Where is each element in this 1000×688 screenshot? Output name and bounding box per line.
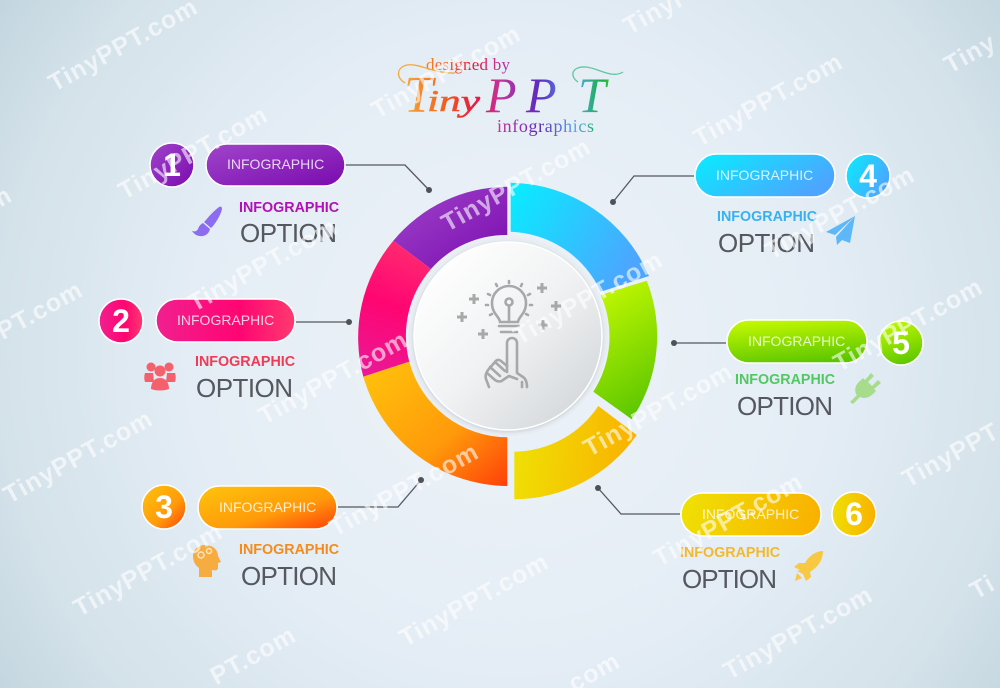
icon: electric plug bbox=[850, 373, 881, 404]
watermark: repeated TinyPPT.com: TinyPPT.com bbox=[367, 19, 526, 125]
label 1: INFOGRAPHIC bbox=[239, 200, 339, 216]
watermark: repeated TinyPPT.com: TinyPPT.com bbox=[254, 325, 413, 431]
icon: paper plane bbox=[826, 216, 855, 245]
label 2 bbox=[195, 354, 295, 403]
label 6: OPTION bbox=[682, 564, 777, 594]
segment 1: purple bbox=[393, 187, 507, 269]
watermark: repeated TinyPPT.com: TinyPPT.com bbox=[761, 160, 920, 266]
icon: rocket bbox=[794, 551, 823, 581]
number badge 1 bbox=[150, 143, 194, 187]
segment 3: orange bbox=[363, 362, 507, 486]
leader line 4 bbox=[610, 176, 694, 205]
leader line 5 bbox=[671, 340, 726, 346]
label 5 bbox=[735, 372, 835, 421]
icon: group of people bbox=[144, 362, 176, 390]
label 4: OPTION bbox=[718, 228, 815, 258]
pill 4: INFOGRAPHIC bbox=[716, 167, 813, 183]
number badge 6: 6 bbox=[845, 496, 863, 532]
pill 6: INFOGRAPHIC bbox=[702, 506, 799, 522]
label 2: OPTION bbox=[196, 373, 293, 403]
leader line 3 bbox=[338, 477, 424, 507]
label 3: INFOGRAPHIC bbox=[239, 542, 339, 558]
watermark: repeated TinyPPT.com: TinyPPT.com bbox=[437, 132, 596, 238]
label 6: INFOGRAPHIC bbox=[680, 545, 780, 561]
label 6 bbox=[680, 545, 780, 594]
number badge 2 bbox=[99, 299, 143, 343]
label 5: OPTION bbox=[737, 391, 833, 421]
number badge 2: 2 bbox=[112, 303, 130, 339]
icon: light bulb with pointing hand bbox=[457, 281, 561, 387]
segment 6: yellow bbox=[514, 406, 637, 499]
leader line 2 bbox=[296, 319, 352, 325]
watermark: repeated TinyPPT.com: TinyPPT.com bbox=[509, 245, 668, 351]
logo: designed by TinyPPT infographics: T bbox=[404, 67, 436, 124]
watermark: repeated TinyPPT.com: TinyPPT.com bbox=[69, 517, 228, 623]
watermark: repeated TinyPPT.com: TinyPPT.com bbox=[649, 467, 808, 573]
label 3 bbox=[239, 542, 339, 591]
segment 4: blue bbox=[511, 183, 649, 292]
pill 4 bbox=[695, 154, 835, 197]
icon: paint brush bbox=[192, 207, 222, 236]
pill 2: INFOGRAPHIC bbox=[177, 312, 274, 328]
logo: designed by TinyPPT infographics: iny bbox=[427, 83, 480, 118]
watermark: repeated TinyPPT.com: TinyPPT.com bbox=[719, 580, 878, 686]
watermark: repeated TinyPPT.com: TinyPPT.com bbox=[184, 212, 343, 318]
label 5: INFOGRAPHIC bbox=[735, 372, 835, 388]
pill 1 bbox=[206, 144, 345, 186]
logo: designed by TinyPPT infographics: designed by bbox=[426, 55, 510, 74]
icon: head with gears bbox=[193, 545, 221, 577]
logo: designed by TinyPPT infographics bbox=[398, 55, 623, 136]
segment 2: pink bbox=[358, 241, 431, 377]
number badge 6 bbox=[832, 492, 876, 536]
option 6: yellow bbox=[595, 485, 876, 594]
watermark: repeated TinyPPT.com: TinyPPT.com bbox=[0, 404, 158, 510]
pill 1: INFOGRAPHIC bbox=[227, 156, 324, 172]
leader line 6 bbox=[595, 485, 680, 514]
pill 5: INFOGRAPHIC bbox=[748, 333, 845, 349]
number badge 3: 3 bbox=[155, 489, 173, 525]
option 1: purple bbox=[150, 143, 432, 248]
number badge 3 bbox=[142, 485, 186, 529]
number badge 4 bbox=[846, 154, 890, 198]
option 2: pink bbox=[99, 299, 352, 403]
watermark: repeated TinyPPT.com: TinyPPT.com bbox=[829, 272, 988, 378]
pill 3: INFOGRAPHIC bbox=[219, 499, 316, 515]
number badge 5 bbox=[879, 321, 923, 365]
pill 3 bbox=[198, 486, 337, 529]
logo: designed by TinyPPT infographics: infographics bbox=[497, 116, 594, 136]
centre disc bbox=[408, 236, 608, 436]
label 4: INFOGRAPHIC bbox=[717, 209, 817, 225]
leader line 1 bbox=[345, 165, 432, 193]
watermark: repeated TinyPPT.com: TinyPPT.com bbox=[689, 47, 848, 153]
icon: sparkle plus marks bbox=[457, 283, 561, 339]
label 1: OPTION bbox=[240, 218, 337, 248]
label 3: OPTION bbox=[241, 561, 337, 591]
label 1 bbox=[239, 200, 339, 248]
watermark: repeated TinyPPT.com: Tiny bbox=[939, 28, 1000, 79]
number badge 4: 4 bbox=[859, 158, 877, 194]
donut chart with six segments bbox=[358, 183, 657, 499]
label 2: INFOGRAPHIC bbox=[195, 354, 295, 370]
watermark: repeated TinyPPT.com: TinyPPT.com bbox=[114, 100, 273, 206]
label 4 bbox=[717, 209, 817, 258]
watermark: repeated TinyPPT.com: TinyPPT.com bbox=[325, 437, 484, 543]
pill 2 bbox=[156, 299, 295, 342]
watermark: repeated TinyPPT.com: TinyPPT.com bbox=[395, 547, 554, 653]
logo: designed by TinyPPT infographics: PPT bbox=[485, 67, 609, 123]
option 5: green bbox=[671, 320, 923, 421]
number badge 5: 5 bbox=[892, 325, 910, 361]
pill 6 bbox=[681, 493, 821, 536]
option 4: blue bbox=[610, 154, 890, 258]
number badge 1: 1 bbox=[163, 147, 181, 183]
watermark: repeated TinyPPT.com: TinyPPT.com bbox=[579, 357, 738, 463]
pill 5 bbox=[727, 320, 867, 363]
watermark: repeated TinyPPT.com: Ti bbox=[965, 569, 1000, 605]
segment 5: green bbox=[593, 281, 657, 419]
option 3: orange bbox=[142, 477, 424, 591]
